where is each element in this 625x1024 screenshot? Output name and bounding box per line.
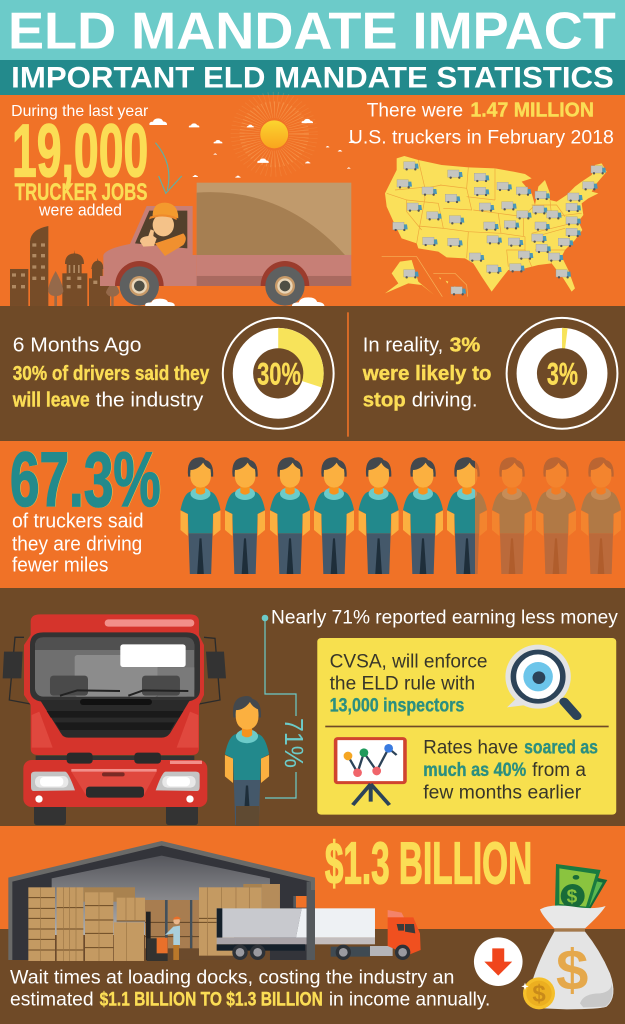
text: rates soared: from a bbox=[532, 759, 586, 781]
text: 1.47 million truckers: There were bbox=[367, 99, 463, 121]
text: in reality 3 percent: In reality, bbox=[363, 334, 443, 356]
panel: header bbox=[0, 0, 625, 95]
icon: clouds bbox=[149, 118, 356, 178]
icon: red truck front bbox=[3, 614, 226, 825]
text: of truckers said bbox=[12, 510, 143, 576]
text: of truckers said: they are driving bbox=[12, 532, 142, 555]
text: rates soared bbox=[423, 736, 598, 803]
panel: loading docks bbox=[0, 826, 625, 1024]
text: 30 percent of drivers bbox=[12, 333, 210, 411]
chart: pictogram of ten people bbox=[181, 457, 621, 574]
text: rates soared: Rates have bbox=[423, 736, 518, 758]
text: wait times: $1.1 BILLION TO $1.3 BILLION bbox=[100, 989, 323, 1010]
text: 1.47 million truckers: 1.47 MILLION bbox=[470, 99, 594, 121]
chart: donut 30 percent bbox=[223, 318, 334, 429]
icon: money bag: $ bbox=[556, 938, 588, 1002]
chart: donut 3 percent: 3% bbox=[547, 356, 578, 392]
text: CVSA inspectors: CVSA, will enforce bbox=[330, 650, 487, 672]
text: during the last year: During the last year bbox=[11, 101, 148, 120]
icon: semi truck bbox=[217, 890, 421, 960]
text: wait times: Wait times at loading docks, costing the industry an bbox=[10, 967, 454, 988]
icon: money bag: $ bbox=[567, 886, 578, 907]
text: wait times bbox=[10, 967, 490, 1010]
divider bbox=[325, 726, 609, 727]
callout: 71 percent bracket bbox=[262, 615, 309, 798]
text: in reality 3 percent: driving. bbox=[412, 389, 478, 411]
text: wait times: estimated bbox=[10, 989, 94, 1010]
text: CVSA inspectors: 13,000 inspectors bbox=[330, 694, 464, 716]
icon: money bag bbox=[521, 864, 613, 1009]
icon: sun bbox=[238, 98, 311, 171]
panel: yellow callouts bbox=[317, 638, 616, 815]
text: 30 percent of drivers: the industry bbox=[96, 388, 204, 411]
text: 30 percent of drivers: 30% of drivers said they bbox=[13, 361, 210, 385]
text: rates soared: few months earlier bbox=[423, 781, 581, 803]
text: 30 percent of drivers: will leave bbox=[12, 388, 90, 411]
text: in reality 3 percent bbox=[362, 334, 492, 411]
text: 30 percent of drivers: 6 Months Ago bbox=[13, 333, 142, 356]
callout: 71 percent bracket: 71% bbox=[279, 718, 309, 768]
text: were added: were added bbox=[38, 200, 122, 219]
panel: trucker jobs and map: 19,000 bbox=[12, 109, 148, 193]
chart: donut 30 percent: 30% bbox=[257, 356, 301, 392]
panel: driver survey bbox=[0, 306, 625, 442]
map: united states with trucks bbox=[382, 156, 607, 297]
icon: city skyline bbox=[10, 226, 119, 306]
text: trucker jobs: TRUCKER JOBS bbox=[15, 178, 147, 205]
text: wait times: in income annually. bbox=[329, 989, 490, 1010]
chart: donut 3 percent bbox=[507, 318, 617, 429]
text: of truckers said: fewer miles bbox=[12, 553, 108, 576]
panel: fewer miles bbox=[0, 441, 625, 574]
text: of truckers said: of truckers said bbox=[12, 510, 143, 532]
text: CVSA inspectors bbox=[330, 650, 487, 716]
panel: earnings and enforcement bbox=[0, 588, 625, 826]
icon: warehouse bbox=[8, 841, 315, 961]
icon: down arrow bbox=[474, 937, 523, 986]
text: in reality 3 percent: 3% bbox=[450, 334, 481, 356]
icon: standing person bbox=[225, 696, 269, 826]
icon: magnifying glass bbox=[505, 645, 577, 716]
text: 1.47 million truckers bbox=[349, 99, 614, 148]
text: rates soared: much as 40% bbox=[423, 759, 526, 781]
icon: delivery truck bbox=[100, 183, 351, 307]
panel: trucker jobs and map bbox=[0, 95, 625, 307]
text: in reality 3 percent: were likely to bbox=[362, 361, 492, 385]
icon: money bag: $ bbox=[532, 981, 546, 1008]
text: in reality 3 percent: stop bbox=[363, 388, 406, 411]
divider bbox=[347, 312, 349, 437]
arrow: curved teal bbox=[155, 143, 182, 193]
icon: chart board bbox=[336, 739, 405, 805]
stat: 67.3 percent: 67.3% bbox=[10, 437, 161, 523]
text: CVSA inspectors: the ELD rule with bbox=[330, 672, 475, 694]
